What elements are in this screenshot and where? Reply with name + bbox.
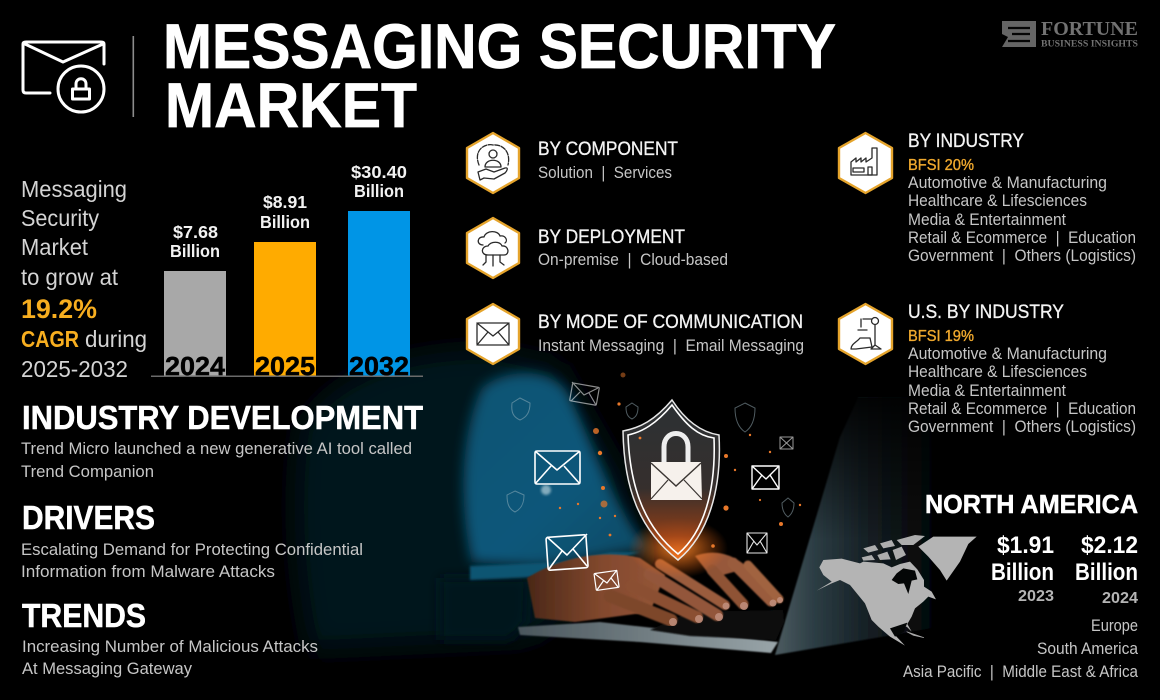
title: MESSAGING SECURITY — [163, 12, 836, 82]
laptop lid — [775, 398, 945, 655]
panel: U.S. by industry: BFSI 19% — [908, 328, 974, 345]
panel: industry development — [21, 399, 423, 481]
panel: U.S. by industry — [839, 302, 1136, 436]
panel: North America: NORTH AMERICA — [925, 489, 1138, 519]
panel: by industry: BFSI 20% — [908, 157, 974, 174]
bar 2024: Billion — [170, 241, 220, 261]
lit shirt — [464, 373, 648, 566]
panel: industry development: Trend Micro launched a new generative AI tool called — [21, 440, 412, 458]
bar 2025: $8.91 — [263, 192, 307, 212]
text block: market growth summary: 19.2% — [21, 294, 97, 324]
value 2023: $1.91 — [997, 532, 1054, 559]
dark torso and arm — [295, 350, 650, 650]
icon: factory — [839, 133, 892, 193]
panel: by component: BY COMPONENT — [538, 139, 678, 160]
bar 2024: $7.68 — [173, 222, 218, 242]
value 2024 — [1075, 532, 1138, 607]
text block: market growth summary: Market — [21, 234, 89, 260]
logo: Fortune Business Insights — [1002, 18, 1138, 50]
panel: U.S. by industry: Government | Others (Logistics) — [908, 418, 1136, 436]
background photo: person at laptop — [295, 350, 960, 655]
value 2024: $2.12 — [1081, 532, 1138, 559]
panel: U.S. by industry: Automotive & Manufacturing — [908, 345, 1107, 363]
small shields — [507, 398, 794, 517]
bar 2025 — [254, 192, 316, 381]
value 2023: Billion — [991, 559, 1054, 586]
envelopes — [535, 382, 793, 590]
logo: Fortune Business Insights: BUSINESS INSIGHTS — [1041, 40, 1138, 50]
title — [163, 12, 836, 141]
panel: U.S. by industry: Media & Entertainment — [908, 382, 1066, 400]
panel: by industry: Retail & Ecommerce | Education — [908, 229, 1136, 247]
panel: trends: At Messaging Gateway — [22, 660, 193, 678]
panel: by industry: Media & Entertainment — [908, 211, 1066, 229]
panel: trends: TRENDS — [22, 597, 146, 634]
bar 2032 — [348, 162, 410, 381]
bar 2032: 2032 — [349, 351, 409, 381]
panel: industry development: INDUSTRY DEVELOPMENT — [22, 399, 423, 436]
shield — [623, 400, 719, 560]
orange particles — [559, 372, 801, 548]
icon: envelope with padlock — [23, 42, 104, 112]
panel: industry development: Trend Companion — [21, 463, 154, 481]
panel: North America: Europe — [1091, 617, 1138, 635]
icon: car assembly robot — [839, 304, 892, 364]
text block: market growth summary: 2025-2032 — [21, 356, 128, 382]
panel: drivers: DRIVERS — [22, 499, 155, 536]
finger nails — [669, 597, 783, 626]
keyboard — [650, 610, 784, 640]
panel: by industry: Automotive & Manufacturing — [908, 174, 1107, 192]
text block: market growth summary: Security — [21, 205, 99, 231]
panel: by deployment — [467, 218, 728, 278]
panel: by mode of communication — [467, 304, 804, 364]
panel: by component — [467, 133, 678, 193]
bar 2024: 2024 — [165, 351, 226, 381]
icon: hand holding person — [467, 133, 519, 193]
logo: Fortune Business Insights: FORTUNE — [1041, 18, 1138, 40]
panel: North America — [903, 489, 1139, 681]
header divider — [132, 36, 134, 117]
text block: market growth summary: to grow at — [21, 264, 119, 290]
bar 2025: Billion — [260, 212, 310, 232]
text block: market growth summary — [21, 176, 147, 382]
bar 2024 — [164, 222, 226, 381]
value 2024: 2024 — [1102, 590, 1138, 607]
value 2023: 2023 — [1018, 588, 1054, 605]
text block: market growth summary: CAGR — [21, 326, 79, 352]
cuff — [440, 578, 528, 640]
icon: cloud network — [467, 218, 519, 278]
bar 2025: 2025 — [255, 351, 315, 381]
panel: drivers: Escalating Demand for Protecting Confidential — [21, 541, 363, 559]
panel: by mode of communication: Instant Messaging | Email Messaging — [538, 337, 804, 355]
value 2024: Billion — [1075, 559, 1138, 586]
panel: by industry — [839, 131, 1136, 265]
panel: by deployment: BY DEPLOYMENT — [538, 227, 685, 248]
panel: by deployment: On-premise | Cloud-based — [538, 251, 728, 269]
panel: by industry: BY INDUSTRY — [908, 131, 1024, 152]
title: MARKET — [165, 71, 417, 141]
panel: North America: South America — [1037, 640, 1139, 658]
panel: U.S. by industry: Healthcare & Lifesciences — [908, 363, 1087, 381]
panel: by mode of communication: BY MODE OF COMMUNICATION — [538, 312, 803, 333]
glow — [628, 518, 728, 578]
panel: by industry: Government | Others (Logistics) — [908, 247, 1136, 265]
panel: trends: Increasing Number of Malicious Attacks — [22, 638, 318, 656]
map: North America — [817, 535, 977, 646]
panel: drivers: Information from Malware Attacks — [21, 563, 275, 581]
panel: drivers — [21, 499, 363, 581]
bar 2032: Billion — [354, 181, 404, 201]
laptop base — [518, 622, 778, 653]
text block: market growth summary: during — [85, 326, 147, 352]
text block: market growth summary: Messaging — [21, 176, 127, 202]
laptop lid top fade — [805, 398, 960, 545]
panel: U.S. by industry: Retail & Ecommerce | Education — [908, 400, 1136, 418]
left hand — [527, 554, 725, 622]
value 2023 — [991, 532, 1054, 605]
icon: envelope — [467, 304, 519, 364]
panel: by component: Solution | Services — [538, 164, 672, 182]
bar 2032: $30.40 — [351, 162, 407, 182]
panel: by industry: Healthcare & Lifesciences — [908, 192, 1087, 210]
bar chart — [151, 162, 423, 381]
panel: trends — [22, 597, 318, 678]
panel: North America: Asia Pacific | Middle East & Africa — [903, 663, 1139, 681]
panel: U.S. by industry: U.S. BY INDUSTRY — [908, 302, 1064, 323]
sleeve stripe — [470, 552, 640, 580]
right hand — [695, 553, 779, 604]
